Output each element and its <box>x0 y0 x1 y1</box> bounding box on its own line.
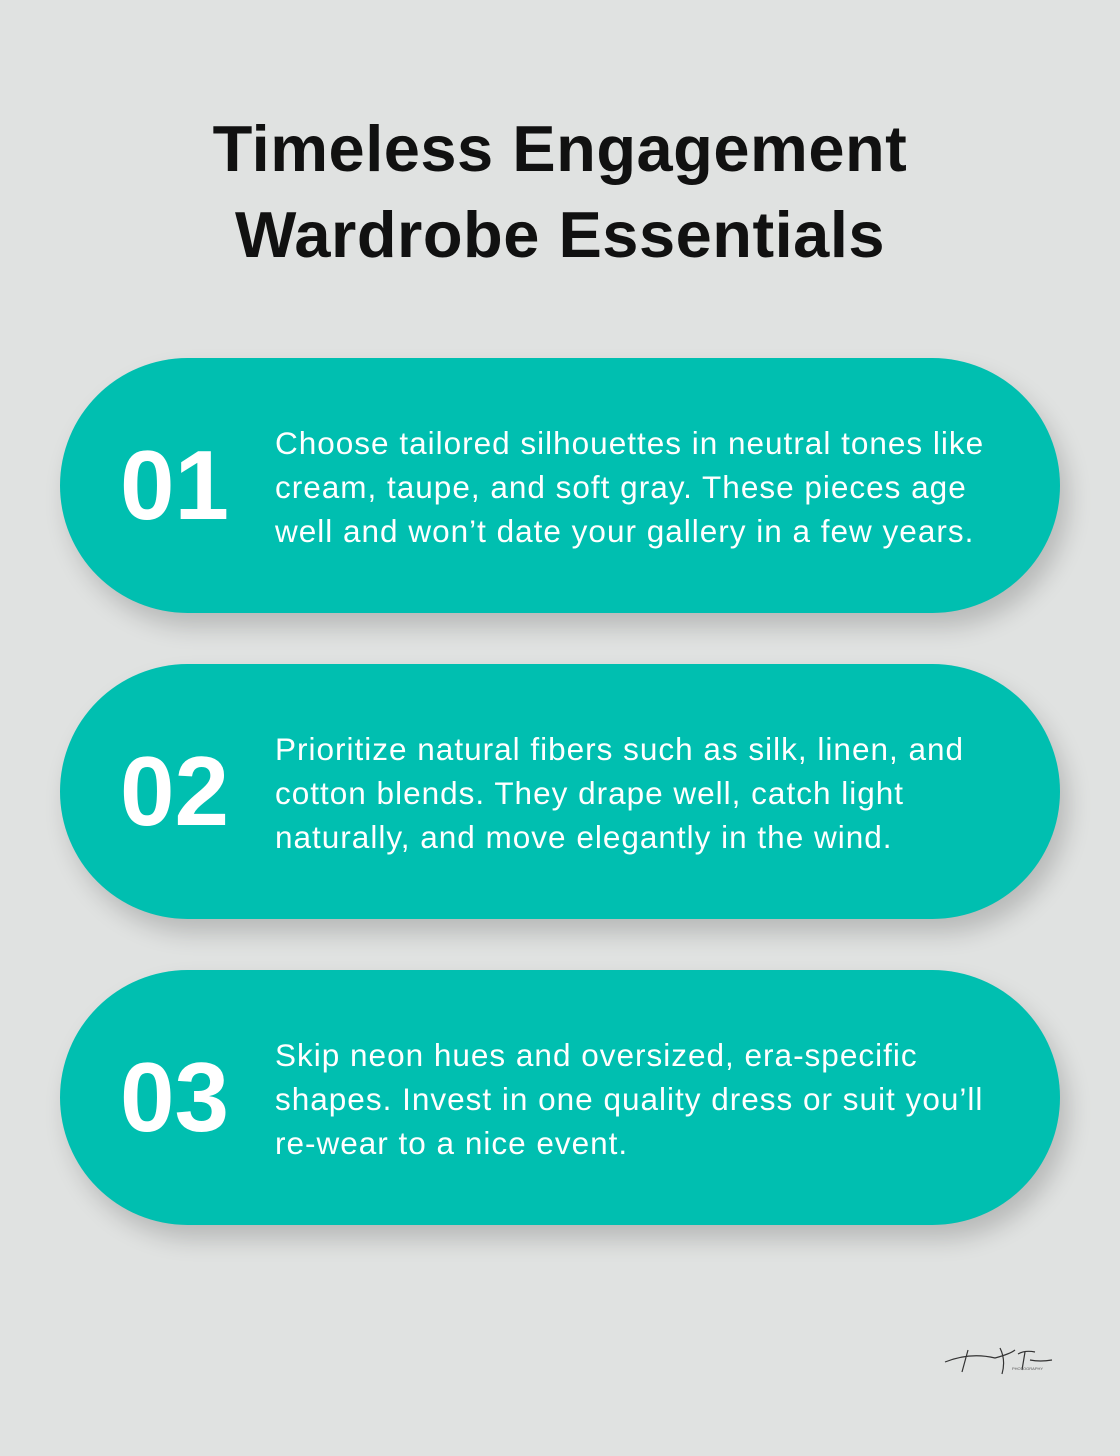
text 02: naturally, and move elegantly in the wind. <box>275 819 893 855</box>
text 03: re-wear to a nice event. <box>275 1125 628 1161</box>
panel: item 02 <box>60 664 1060 919</box>
number 03: 03 <box>120 1042 229 1152</box>
text 02: Prioritize natural fibers such as silk, linen, and <box>275 731 964 767</box>
title: Wardrobe Essentials <box>235 198 885 271</box>
text 02 <box>275 731 964 855</box>
text 01: Choose tailored silhouettes in neutral tones like <box>275 425 984 461</box>
title: Timeless Engagement <box>213 112 907 185</box>
panel: item 03 <box>60 970 1060 1225</box>
text 03: Skip neon hues and oversized, era-specific <box>275 1037 918 1073</box>
title <box>213 112 907 271</box>
text 03: shapes. Invest in one quality dress or suit you’ll <box>275 1081 983 1117</box>
text 02: cotton blends. They drape well, catch light <box>275 775 904 811</box>
number 02: 02 <box>120 736 229 846</box>
text 01 <box>275 425 984 549</box>
panel: item 01 <box>60 358 1060 613</box>
logo: signature: PHOTOGRAPHY <box>1012 1366 1043 1371</box>
number 01: 01 <box>120 430 229 540</box>
text 01: well and won’t date your gallery in a few years. <box>275 513 974 549</box>
text 03 <box>275 1037 983 1161</box>
logo: signature <box>944 1348 1052 1374</box>
text 01: cream, taupe, and soft gray. These pieces age <box>275 469 967 505</box>
